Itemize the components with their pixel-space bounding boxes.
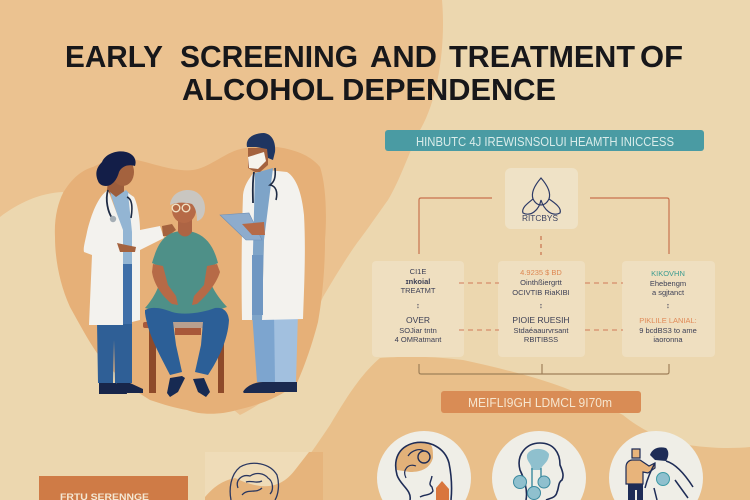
process card: centre: Stdaéaaurvrsant	[513, 326, 569, 335]
process card: left: TREATMT	[401, 286, 436, 295]
icon: brain	[230, 463, 278, 500]
icon circle: head with network	[492, 431, 586, 500]
process card: centre: ↕	[539, 301, 543, 310]
tunic	[145, 231, 227, 315]
trousers	[145, 308, 229, 375]
title: AND	[370, 39, 437, 74]
shoes	[99, 383, 143, 394]
stethoscope	[253, 172, 254, 203]
result bar	[441, 391, 641, 413]
process card: left: 4 OMRatmant	[395, 335, 442, 344]
process card: right: 9 bcdBS3 to ame	[639, 326, 697, 335]
blob behind figures	[55, 146, 326, 414]
title: SCREENING	[180, 39, 358, 74]
seated patient	[145, 190, 229, 397]
process header bar: HINBUTC 4J IREWISNSOLUI HEAMTH INICCESS	[416, 134, 674, 149]
trousers	[252, 312, 275, 382]
glasses	[172, 204, 180, 212]
scrubs	[252, 168, 273, 320]
bottom-left label box	[39, 476, 188, 500]
shoes	[167, 376, 210, 397]
stool	[143, 320, 224, 393]
process card: right: ↕	[666, 301, 670, 310]
illustration: clinical screening scene	[55, 133, 326, 414]
process card: left: SOJiar tntn	[399, 326, 437, 335]
hair	[96, 151, 136, 186]
process card: centre: RBITIBSS	[524, 335, 558, 344]
process card: centre: 4.9235 $ BD	[520, 268, 562, 277]
connectors: top node to columns	[419, 198, 669, 255]
icon: knot	[523, 178, 560, 214]
shoes	[243, 382, 297, 393]
top process node: RITCBYS	[522, 214, 558, 223]
process card: left: CI1E	[410, 267, 426, 276]
process header bar	[385, 130, 704, 151]
title: ALCOHOL DEPENDENCE	[182, 72, 556, 107]
process card: right	[622, 261, 715, 357]
process card: right: Ehebengm	[650, 279, 686, 288]
left doctor	[84, 151, 176, 394]
trousers	[97, 322, 132, 383]
stethoscope	[107, 190, 112, 218]
process card: left: OVER	[406, 315, 430, 325]
process card: centre	[498, 261, 585, 357]
scrubs	[110, 190, 134, 264]
process card: left: ↕	[416, 301, 420, 310]
process card: centre: PIOIE RUESIH	[512, 315, 570, 325]
result bar: MEIFLI9GH LDMCL 9I70m	[468, 395, 612, 410]
coat	[242, 170, 305, 320]
forearm and hands	[117, 243, 136, 252]
bottom brain panel	[205, 452, 323, 500]
process card: centre: Ointhßiergrtt	[520, 278, 563, 287]
hair	[170, 190, 205, 221]
title: TREATMENT	[449, 39, 635, 74]
process card: centre: OCIVTIB RiaKIBI	[512, 288, 570, 297]
process card: right: KIKOVHN	[651, 269, 685, 278]
process card: left: ɪnkoial	[406, 277, 430, 286]
coat body	[84, 190, 123, 325]
title: EARLY	[65, 39, 163, 74]
bracket connector	[419, 364, 669, 374]
neck and face	[178, 218, 192, 236]
title	[65, 39, 683, 107]
process card: right: a sgjtanct	[652, 288, 685, 297]
face	[248, 148, 268, 172]
hair	[247, 133, 275, 160]
process card: right: iaoronna	[653, 335, 683, 344]
process card: left	[372, 261, 464, 357]
right doctor	[220, 133, 305, 393]
icon circle: head with brain	[377, 431, 471, 500]
dashed links between cards	[459, 283, 623, 330]
mask	[248, 152, 266, 169]
arms	[152, 264, 220, 305]
icon circle: two people	[609, 431, 703, 500]
title: OF	[640, 39, 683, 74]
top process node	[505, 168, 578, 229]
clipboard	[220, 213, 262, 240]
neck and face	[107, 178, 124, 200]
process card: right: PIKLILE LANIAL:	[639, 316, 697, 325]
hand	[242, 222, 265, 235]
